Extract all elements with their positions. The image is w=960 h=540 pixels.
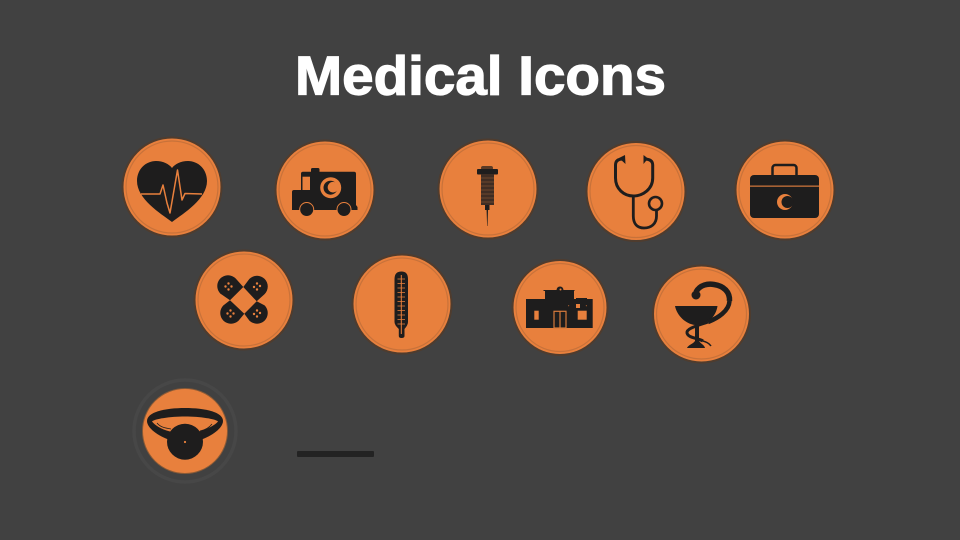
icon: hospital building [512, 260, 608, 355]
icon: thermometer [352, 254, 452, 354]
icon: stethoscope [586, 142, 686, 241]
icon: ambulance [276, 140, 374, 240]
bar: dark line [297, 451, 374, 457]
icon: crossed bandages [194, 250, 294, 350]
icon: eye patch [134, 380, 236, 482]
icon: syringe [438, 140, 538, 238]
title: Medical Icons [295, 44, 666, 106]
icon: medical case [736, 140, 834, 240]
icon: bowl of hygieia [653, 266, 750, 362]
icon: heart with pulse [122, 138, 222, 236]
